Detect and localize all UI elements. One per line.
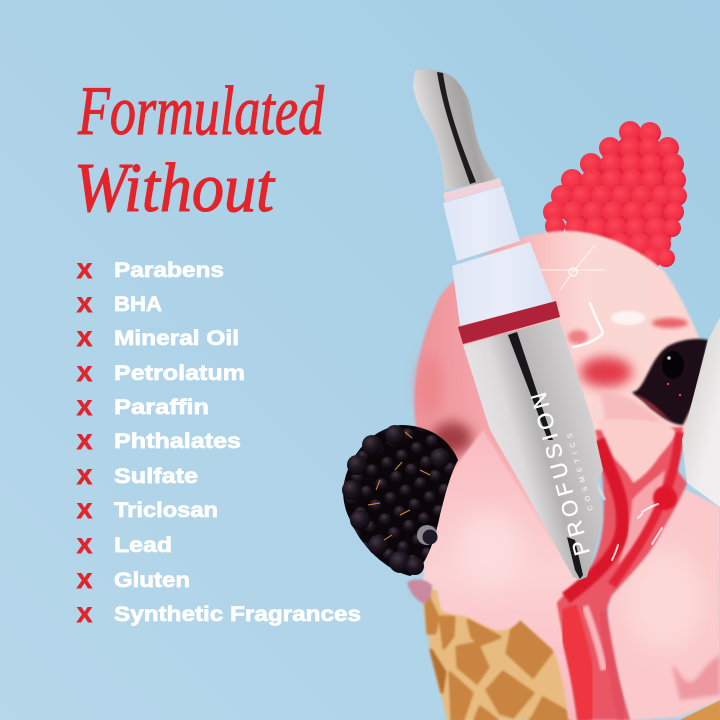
item: Phthalates: X: [77, 431, 92, 454]
item: Parabens: X: [77, 260, 92, 283]
silver body: [463, 319, 603, 580]
product: applicator pen with cap: [413, 69, 603, 580]
item: Synthetic Fragrances: Synthetic Fragrances: [114, 603, 361, 626]
item: Parabens: Parabens: [114, 259, 224, 282]
small blackberry, right: [632, 339, 708, 425]
wide cap: [452, 242, 553, 326]
white neck: [443, 186, 520, 261]
title: Formulated Without: Without: [74, 150, 275, 227]
item: Phthalates: [77, 430, 241, 454]
item: Synthetic Fragrances: X: [77, 604, 92, 627]
waffle cone: [422, 585, 720, 720]
item: Lead: X: [77, 535, 92, 558]
red band: [458, 301, 560, 344]
item: Lead: [77, 534, 172, 558]
brand: COSMETICS: COSMETICS: [567, 432, 595, 511]
large blackberry: [342, 425, 458, 576]
item: Petrolatum: Petrolatum: [114, 362, 245, 385]
brand: PROFUSION: PROFUSION: [526, 390, 595, 558]
gloss: [612, 504, 662, 560]
lower right scoop: [607, 490, 720, 720]
melted red patches: [580, 357, 632, 387]
item: Lead: Lead: [114, 534, 172, 557]
item: Phthalates: Phthalates: [114, 430, 241, 453]
item: Petrolatum: [77, 362, 245, 386]
item: Sulfate: X: [77, 466, 92, 489]
item: BHA: X: [77, 294, 92, 317]
item: Parabens: [77, 259, 224, 283]
item: Triclosan: Triclosan: [114, 499, 218, 522]
ice cream: lower scoops: [407, 430, 720, 720]
item: Gluten: [77, 569, 190, 593]
list of excluded ingredients: [77, 259, 361, 627]
second pen, right edge: [682, 317, 720, 507]
item: Mineral Oil: Mineral Oil: [114, 327, 239, 350]
item: Triclosan: [77, 499, 218, 523]
stream right: [612, 432, 680, 585]
title: Formulated Without: Formulated: [77, 73, 325, 150]
item: Sulfate: [77, 465, 198, 489]
item: BHA: BHA: [114, 293, 162, 316]
item: Triclosan: X: [77, 500, 92, 523]
title: Formulated Without: [74, 73, 325, 227]
pale middle island: [618, 470, 665, 565]
lower left scoop: [422, 430, 580, 720]
item: Paraffin: [77, 396, 209, 420]
item: Mineral Oil: X: [77, 328, 92, 351]
item: BHA: [77, 293, 162, 317]
item: Sulfate: Sulfate: [114, 465, 198, 488]
berry stain: [407, 579, 432, 604]
item: Paraffin: Paraffin: [114, 396, 209, 419]
black stripe: [508, 332, 553, 440]
stream left: [566, 440, 623, 598]
item: Petrolatum: X: [77, 363, 92, 386]
item: Gluten: Gluten: [114, 569, 190, 592]
red syrup: [557, 419, 687, 720]
cream island: [597, 419, 677, 483]
lower stream: [565, 608, 590, 720]
ice cream: top scoop: [414, 231, 700, 720]
item: Mineral Oil: [77, 327, 239, 351]
item: Gluten: X: [77, 570, 92, 593]
syrup base: [557, 427, 687, 720]
item: Paraffin: X: [77, 397, 92, 420]
silver tip: [413, 69, 496, 190]
waffle cells: [425, 590, 570, 720]
pink collar: [443, 178, 502, 202]
raspberry: [543, 121, 687, 268]
glossy highlights: [573, 303, 603, 347]
